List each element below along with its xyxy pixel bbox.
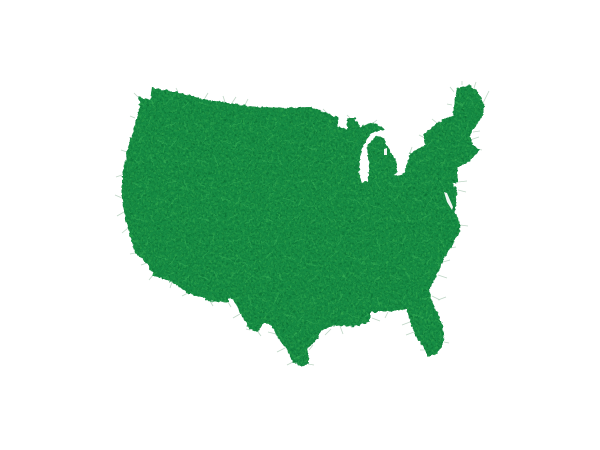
small Michigan inlet xyxy=(384,148,387,155)
grass-textured country shape xyxy=(122,84,485,366)
light grain xyxy=(122,86,485,366)
lake and bay cut-outs xyxy=(384,148,453,210)
dark grain xyxy=(122,85,485,366)
grass blades xyxy=(122,97,475,359)
Chesapeake Bay xyxy=(444,192,453,210)
map: contiguous United States covered in grass xyxy=(114,81,490,366)
edge grass hairs xyxy=(115,81,489,365)
base green xyxy=(122,84,485,366)
